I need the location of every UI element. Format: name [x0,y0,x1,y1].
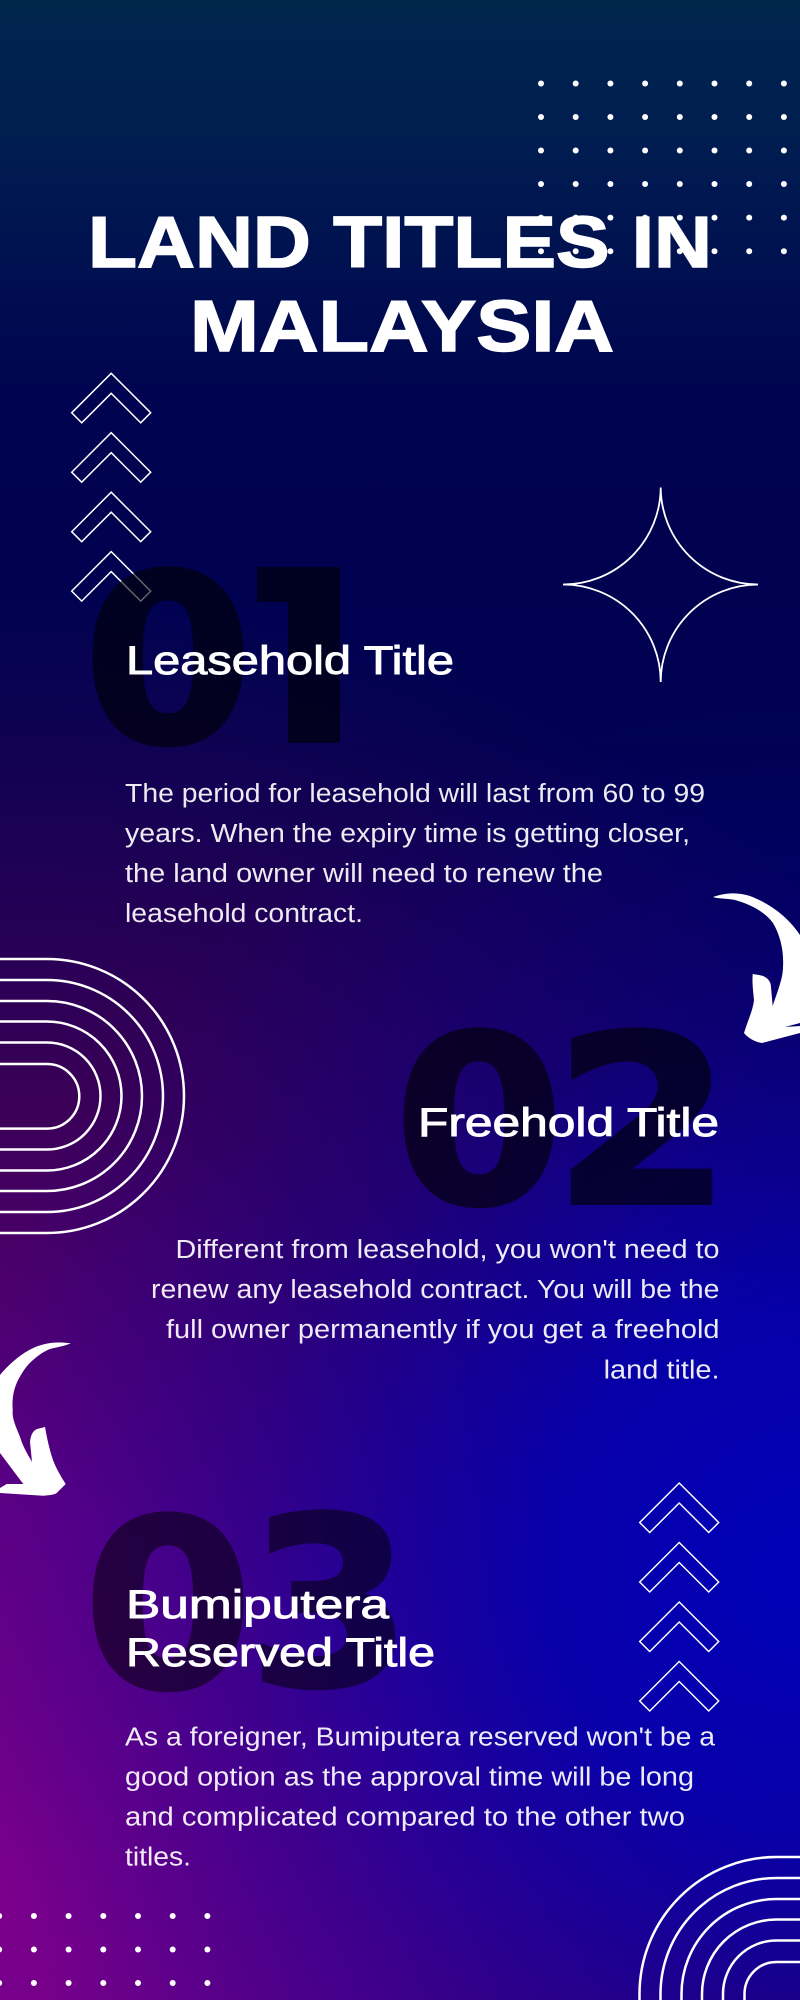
section number 01 [92,566,340,748]
section text: bumiputera: titles. [125,1844,191,1872]
section number 02: 0 [394,987,564,1259]
icon: chevrons right [640,1483,719,1711]
section number 02 [394,987,732,1259]
section heading: Bumiputera Reserved Title: Bumiputera [126,1583,390,1627]
section text: freehold [151,1236,720,1384]
icon: dot grid top right [538,80,787,254]
section number 02: 2 [552,987,732,1259]
arrow: right curved arrow [713,893,800,1043]
arrow: left curved arrow [0,1343,71,1496]
section text: bumiputera: As a foreigner, Bumiputera reserved won't be a [125,1724,716,1752]
section number 03: 3 [248,1469,412,1741]
icon: concentric arcs left [0,959,184,1233]
section text: leasehold: leasehold contract. [125,900,363,928]
title [88,203,712,367]
icon: dot grid bottom left [0,1913,210,1986]
section text: leasehold [125,780,705,928]
section text: freehold: Different from leasehold, you won't need to [176,1236,720,1264]
section text: leasehold: years. When the expiry time is getting closer, [125,820,690,848]
section heading: Bumiputera Reserved Title: Reserved Title [126,1631,435,1675]
section heading: Bumiputera Reserved Title [126,1583,435,1675]
icon: concentric arcs bottom right [640,1857,800,2000]
section heading: Freehold Title: Freehold Title [418,1101,719,1145]
section text: freehold: full owner permanently if you get a freehold [166,1316,720,1344]
section text: freehold: renew any leasehold contract. You will be the [151,1276,720,1304]
icon: four-point star [563,488,758,682]
title: MALAYSIA [190,287,614,367]
section heading: Leasehold Title: Leasehold Title [126,639,454,683]
section number 03: 0 [83,1471,253,1743]
section text: freehold: land title. [604,1356,720,1384]
title: LAND TITLES IN [88,203,712,283]
section text: leasehold: the land owner will need to renew the [125,860,603,888]
icon: chevrons left [72,373,151,601]
section number 03 [83,1469,412,1743]
section text: bumiputera [125,1724,716,1872]
section text: leasehold: The period for leasehold will last from 60 to 99 [125,780,705,808]
section text: bumiputera: good option as the approval time will be long [125,1764,694,1792]
section text: bumiputera: and complicated compared to the other two [125,1804,685,1832]
section number 01: 0 [83,526,253,798]
section number 01: 1 [190,488,410,824]
